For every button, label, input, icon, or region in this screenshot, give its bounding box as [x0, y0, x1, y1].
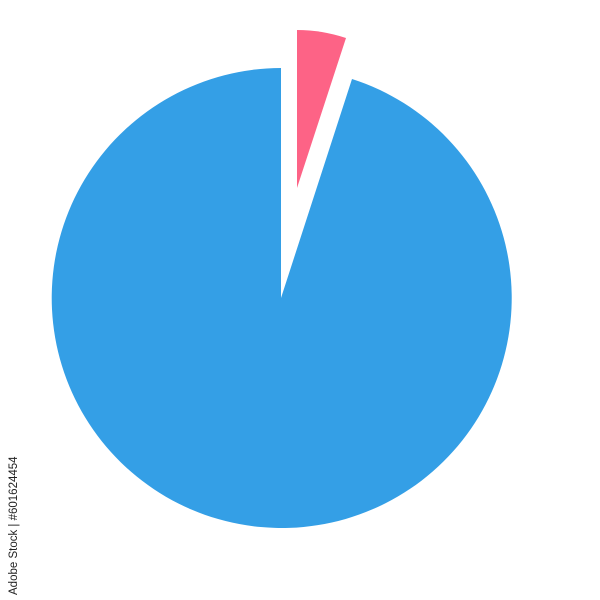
slice: large blue: [52, 68, 512, 528]
slice: small pink exploded: [297, 30, 346, 188]
side text: stock id: Adobe Stock | #601624454: [8, 456, 20, 595]
